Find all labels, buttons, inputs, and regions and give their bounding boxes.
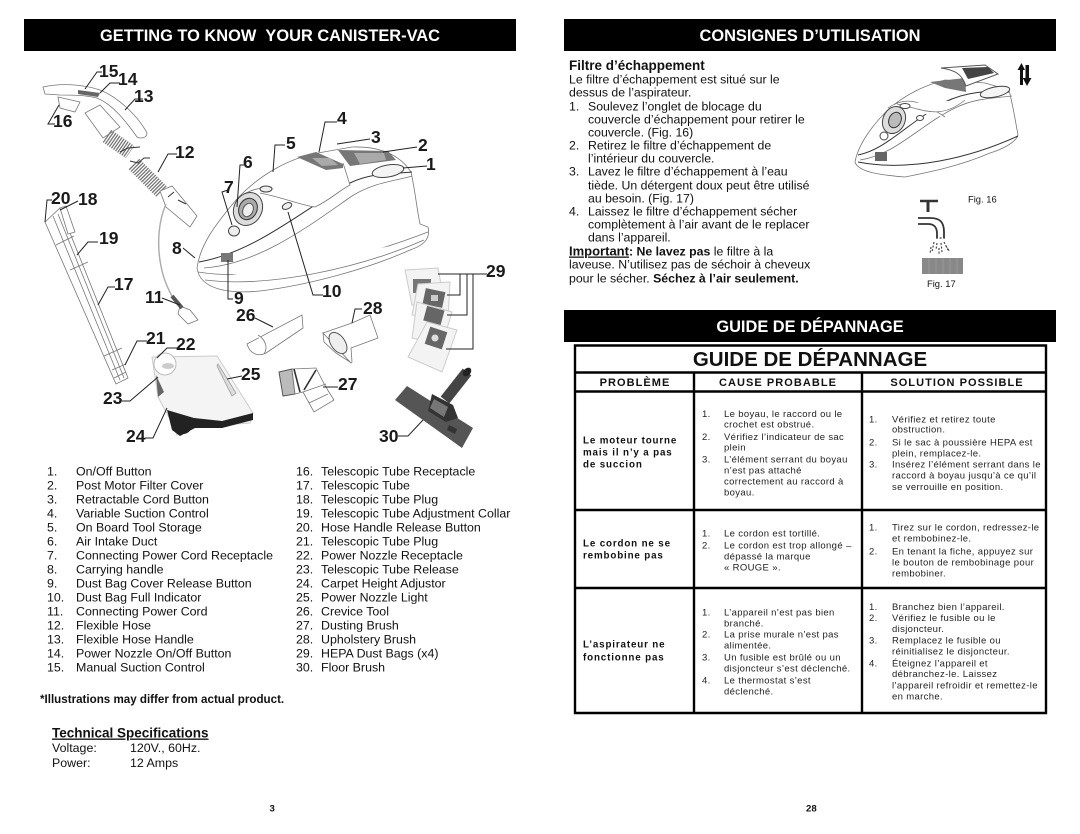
row 3: vacuum does not run: disjoncteur.: [892, 624, 944, 635]
row 1: no suction: obstruction.: [892, 424, 945, 436]
parts list column 1: 10.: [47, 590, 64, 604]
row 2: cord does not rewind: Le cordon est tortillé.: [724, 528, 820, 540]
technical specifications: [52, 726, 209, 770]
part numbers: 21: [146, 328, 166, 348]
parts list column 1: On/Off Button: [76, 464, 152, 478]
parts list column 2: HEPA Dust Bags (x4): [321, 646, 439, 660]
row 1: no suction: Le moteur tourne: [583, 436, 677, 446]
row 3: vacuum does not run: en marche.: [892, 692, 943, 702]
HEPA dust bags: [405, 268, 457, 372]
troubleshooting header bar: [564, 310, 1056, 342]
row 3: vacuum does not run: 1.: [702, 608, 711, 618]
parts list column 1: 4.: [47, 506, 57, 520]
parts list column 2: [296, 464, 510, 674]
row 3: vacuum does not run: Remplacez le fusible ou: [892, 636, 1001, 646]
row 3: vacuum does not run: Éteignez l’appareil et: [892, 658, 988, 670]
parts list column 2: 19.: [296, 506, 313, 520]
row 2: cord does not rewind: « ROUGE ».: [724, 562, 781, 574]
column headings: PROBLÈME: [600, 376, 670, 389]
parts list column 1: 6.: [47, 534, 57, 548]
parts list column 2: 26.: [296, 604, 313, 618]
part numbers: 19: [99, 228, 119, 248]
part numbers: 12: [175, 142, 195, 162]
column headings: CAUSE PROBABLE: [719, 377, 837, 389]
row 3: vacuum does not run: fonctionne pas: [583, 652, 665, 664]
row 3: vacuum does not run: [583, 602, 1038, 702]
row 2: cord does not rewind: dépassé la marque: [724, 552, 811, 562]
row 1: no suction: 2.: [869, 438, 878, 448]
parts list column 2: 28.: [296, 632, 313, 646]
row 1: no suction: se verrouille en position.: [892, 482, 1004, 493]
exhaust filter instructions: Filtre d’échappement: [569, 58, 705, 73]
exhaust filter instructions: 4.: [569, 204, 579, 218]
row 1: no suction: 1.: [869, 414, 878, 426]
row 1: no suction: plein: [724, 442, 746, 454]
parts list column 1: Dust Bag Full Indicator: [76, 590, 201, 604]
row 3: vacuum does not run: alimentée.: [724, 640, 771, 652]
row 1: no suction: Insérez l’élément serrant dans le: [892, 460, 1041, 470]
parts list column 1: [47, 464, 273, 674]
row 2: cord does not rewind: le bouton de rembobinage pour: [892, 558, 1034, 568]
exhaust filter instructions: dessus de l’aspirateur.: [569, 86, 691, 100]
row 3: vacuum does not run: Un fusible est brûlé ou un: [724, 652, 841, 664]
parts list column 1: Carrying handle: [76, 562, 164, 576]
right header bar: [564, 19, 1056, 51]
left header bar: [24, 19, 516, 51]
exhaust filter instructions: Lavez le filtre d’échappement à l’eau: [588, 164, 788, 178]
page number 3: 3: [270, 804, 275, 814]
part numbers: 30: [379, 426, 399, 446]
parts list column 2: 27.: [296, 618, 313, 632]
row 3: vacuum does not run: l’appareil refroidir et remettez-le: [892, 680, 1038, 692]
table title: GUIDE DE DÉPANNAGE: [693, 348, 927, 371]
row 3: vacuum does not run: 4.: [869, 658, 878, 670]
part numbers: 4: [337, 108, 347, 128]
troubleshooting table: [575, 346, 1046, 713]
row 1: no suction: Si le sac à poussière HEPA est: [892, 438, 1033, 448]
exhaust filter instructions: tiède. Un détergent doux peut être utilisé: [588, 178, 810, 192]
row 3: vacuum does not run: Branchez bien l’appareil.: [892, 602, 1005, 613]
parts list column 1: 3.: [47, 492, 57, 506]
exhaust filter instructions: couvercle. (Fig. 16): [588, 126, 693, 140]
row 3: vacuum does not run: La prise murale n’est pas: [724, 630, 839, 640]
row 3: vacuum does not run: Vérifiez le fusible ou le: [892, 613, 996, 624]
row 3: vacuum does not run: branché.: [724, 618, 764, 630]
parts list column 2: 17.: [296, 478, 313, 492]
part numbers: 20: [51, 188, 71, 208]
power nozzle: [152, 353, 253, 436]
part numbers: 9: [234, 288, 244, 308]
part numbers: 14: [118, 69, 138, 89]
parts list column 2: Dusting Brush: [321, 618, 399, 632]
row 3: vacuum does not run: débranchez-le. Laissez: [892, 669, 997, 680]
part numbers: 15: [99, 61, 119, 81]
parts list column 2: 23.: [296, 562, 313, 576]
row 3: vacuum does not run: 2.: [702, 630, 711, 640]
part numbers: 28: [363, 298, 383, 318]
parts list column 2: 25.: [296, 590, 313, 604]
parts list column 1: 15.: [47, 660, 64, 674]
parts list column 2: Upholstery Brush: [321, 632, 416, 646]
upholstery brush: [323, 315, 378, 363]
exhaust filter instructions: au besoin. (Fig. 17): [588, 192, 694, 206]
row 1: no suction: 1.: [702, 409, 711, 420]
parts list column 1: 1.: [47, 464, 57, 478]
figure 17: faucet and filter: [918, 201, 963, 274]
row 3: vacuum does not run: 3.: [869, 636, 878, 646]
table frame and grid: [575, 346, 1046, 713]
page number 28: 28: [806, 804, 817, 814]
figure 16 caption: Fig. 16: [968, 194, 997, 204]
arrows: up and down: [1018, 63, 1032, 86]
row 1: no suction: crochet est obstrué.: [724, 420, 814, 430]
technical specifications: Power:: [52, 756, 91, 770]
row 2: cord does not rewind: et rembobinez-le.: [892, 534, 971, 544]
parts list column 1: Connecting Power Cord: [76, 604, 208, 618]
parts list column 2: Crevice Tool: [321, 604, 389, 618]
exhaust filter instructions: l’intérieur du couvercle.: [588, 152, 714, 166]
row 1: no suction: correctement au raccord à: [724, 476, 844, 488]
row 2: cord does not rewind: [583, 522, 1039, 580]
row 1: no suction: Le boyau, le raccord ou le: [724, 409, 842, 420]
part numbers: 18: [78, 189, 98, 209]
exhaust filter instructions: complètement à l’air avant de le replacer: [588, 218, 809, 232]
row 2: cord does not rewind: 2.: [869, 546, 878, 558]
figure 16: vacuum with lifted cover: [855, 65, 1018, 177]
parts list column 2: 16.: [296, 464, 313, 478]
part numbers: 1: [426, 154, 436, 174]
troubleshooting header bar: GUIDE DE DÉPANNAGE: [716, 317, 904, 336]
parts list column 1: Dust Bag Cover Release Button: [76, 576, 252, 590]
left header bar: GETTING TO KNOW YOUR CANISTER-VAC: [100, 27, 440, 45]
exhaust filter instructions: 2.: [569, 138, 579, 152]
vacuum body: [197, 147, 429, 292]
row 3: vacuum does not run: disjoncteur s’est déclenché.: [724, 664, 851, 674]
row 1: no suction: boyau.: [724, 488, 755, 498]
row 1: no suction: 3.: [702, 454, 711, 466]
parts list column 2: Telescopic Tube Adjustment Collar: [321, 506, 510, 520]
exhaust filter instructions: couvercle d’échappement pour retirer le: [588, 112, 805, 126]
part numbers: [51, 61, 506, 446]
row 1: no suction: Vérifiez et retirez toute: [892, 414, 996, 426]
row 3: vacuum does not run: Le thermostat s’est: [724, 676, 811, 686]
exhaust filter instructions: Retirez le filtre d’échappement de: [588, 138, 771, 152]
exhaust filter instructions: dans l’appareil.: [588, 230, 671, 244]
row 3: vacuum does not run: déclenché.: [724, 686, 773, 698]
telescopic tube: [45, 206, 128, 384]
exhaust filter instructions: [569, 58, 811, 286]
row 1: no suction: 3.: [869, 460, 878, 470]
exhaust filter instructions: Important: Ne lavez pas le filtre à la: [569, 244, 773, 258]
parts list column 1: 9.: [47, 576, 57, 590]
part numbers: 27: [338, 374, 357, 394]
parts list column 1: Flexible Hose: [76, 618, 151, 632]
parts list column 2: 18.: [296, 492, 313, 506]
parts list column 1: 5.: [47, 520, 57, 534]
row 1: no suction: 2.: [702, 432, 711, 443]
part numbers: 11: [145, 287, 164, 307]
parts list column 1: 14.: [47, 646, 64, 660]
parts list column 1: 13.: [47, 632, 64, 646]
row 2: cord does not rewind: rembobine pas: [583, 550, 664, 562]
technical specifications: Technical Specifications: [52, 726, 209, 740]
parts list column 2: 22.: [296, 548, 313, 562]
floor brush: [395, 366, 473, 448]
exhaust filter instructions: Soulevez l’onglet de blocage du: [588, 100, 762, 114]
parts list column 2: 21.: [296, 534, 313, 548]
row 3: vacuum does not run: 2.: [869, 613, 878, 624]
part numbers: 16: [53, 111, 73, 131]
row 2: cord does not rewind: Tirez sur le cordon, redressez-le: [892, 522, 1039, 534]
row 1: no suction: Vérifiez l’indicateur de sac: [724, 432, 844, 443]
parts list column 2: Power Nozzle Receptacle: [321, 548, 463, 562]
parts list column 2: 30.: [296, 660, 313, 674]
technical specifications: 12 Amps: [130, 756, 178, 770]
parts list column 1: Flexible Hose Handle: [76, 632, 194, 646]
parts list column 2: Carpet Height Adjustor: [321, 576, 446, 590]
parts list column 2: Hose Handle Release Button: [321, 520, 481, 534]
parts list column 1: 12.: [47, 618, 64, 632]
column headings: SOLUTION POSSIBLE: [890, 377, 1024, 389]
parts list column 1: Air Intake Duct: [76, 534, 158, 548]
part numbers: 17: [114, 274, 133, 294]
parts list column 2: Telescopic Tube Plug: [321, 492, 438, 506]
row 2: cord does not rewind: Le cordon est trop allongé –: [724, 540, 852, 552]
row 1: no suction: plein, remplacez-le.: [892, 448, 981, 460]
part numbers: 5: [286, 133, 296, 153]
exhaust filter instructions: 1.: [569, 100, 579, 114]
row 1: no suction: [583, 409, 1041, 498]
figure 17 caption: Fig. 17: [927, 278, 956, 289]
row 3: vacuum does not run: 4.: [702, 676, 711, 686]
row 1: no suction: L’élément serrant du boyau: [724, 454, 848, 466]
parts list column 2: 20.: [296, 520, 313, 534]
row 3: vacuum does not run: 3.: [702, 652, 711, 664]
part numbers: 29: [486, 261, 506, 281]
power cord: [159, 204, 198, 324]
parts list column 1: Connecting Power Cord Receptacle: [76, 548, 273, 562]
part numbers: 22: [176, 334, 196, 354]
parts list column 1: Manual Suction Control: [76, 660, 205, 674]
parts diagram: [43, 61, 506, 448]
row 1: no suction: mais il n’y a pas: [583, 448, 673, 458]
part numbers: 7: [224, 177, 234, 197]
part numbers: 6: [243, 152, 253, 172]
row 1: no suction: de succion: [583, 460, 643, 470]
row 3: vacuum does not run: 1.: [869, 602, 878, 613]
part numbers: 25: [241, 364, 261, 384]
parts list column 1: Variable Suction Control: [76, 506, 209, 520]
parts list column 2: Power Nozzle Light: [321, 590, 428, 604]
parts list column 1: 8.: [47, 562, 57, 576]
part numbers: 24: [126, 426, 146, 446]
exhaust filter instructions: laveuse. N’utilisez pas de séchoir à cheveux: [569, 258, 811, 272]
row 2: cord does not rewind: 2.: [702, 540, 711, 552]
exhaust filter instructions: 3.: [569, 164, 579, 178]
parts list column 2: Telescopic Tube: [321, 478, 410, 492]
parts list column 2: Floor Brush: [321, 660, 385, 674]
part numbers: 13: [134, 86, 154, 106]
parts list column 2: Telescopic Tube Receptacle: [321, 464, 475, 478]
parts list column 2: Telescopic Tube Plug: [321, 534, 438, 548]
row 3: vacuum does not run: L’aspirateur ne: [583, 640, 665, 650]
parts list column 1: Power Nozzle On/Off Button: [76, 646, 232, 660]
parts list column 1: 11.: [47, 604, 63, 618]
row 1: no suction: n’est pas attaché: [724, 466, 802, 476]
part numbers: 10: [322, 281, 342, 301]
parts list column 1: 7.: [47, 548, 57, 562]
exhaust filter instructions: Le filtre d’échappement est situé sur le: [569, 72, 780, 86]
row 3: vacuum does not run: réinitialisez le disjoncteur.: [892, 646, 1010, 658]
part numbers: 2: [418, 135, 428, 155]
right header bar: CONSIGNES D’UTILISATION: [700, 27, 920, 45]
row 2: cord does not rewind: rembobiner.: [892, 568, 946, 580]
parts list column 2: 24.: [296, 576, 313, 590]
air intake: [228, 188, 268, 230]
parts list column 2: 29.: [296, 646, 313, 660]
parts list column 1: 2.: [47, 478, 57, 492]
part numbers: 23: [103, 388, 123, 408]
part numbers: 26: [236, 305, 256, 325]
row 2: cord does not rewind: En tenant la fiche, appuyez sur: [892, 546, 1033, 558]
technical specifications: Voltage:: [52, 741, 97, 755]
part numbers: 3: [371, 127, 381, 147]
exhaust filter instructions: Laissez le filtre d’échappement sécher: [588, 204, 797, 218]
hose and handle: [43, 85, 197, 227]
row 2: cord does not rewind: 1.: [702, 528, 711, 540]
parts list column 1: Retractable Cord Button: [76, 492, 209, 506]
parts list column 2: Telescopic Tube Release: [321, 562, 459, 576]
technical specifications: 120V., 60Hz.: [130, 741, 200, 755]
row 2: cord does not rewind: Le cordon ne se: [583, 538, 671, 550]
parts list column 1: On Board Tool Storage: [76, 520, 202, 534]
parts list column 1: Post Motor Filter Cover: [76, 478, 203, 492]
exhaust filter instructions: pour le sécher. Séchez à l’air seulement.: [569, 272, 799, 286]
column headings: [600, 376, 1024, 389]
control panel: [297, 152, 343, 170]
row 3: vacuum does not run: L’appareil n’est pas bien: [724, 608, 835, 618]
dusting brush: [279, 368, 334, 412]
leader lines: [45, 72, 487, 438]
crevice tool: [247, 315, 303, 355]
illustration disclaimer: *Illustrations may differ from actual product.: [40, 693, 284, 706]
part numbers: 8: [172, 238, 182, 258]
row 1: no suction: raccord à boyau jusqu’à ce qu’il: [892, 470, 1036, 482]
row 2: cord does not rewind: 1.: [869, 522, 878, 534]
